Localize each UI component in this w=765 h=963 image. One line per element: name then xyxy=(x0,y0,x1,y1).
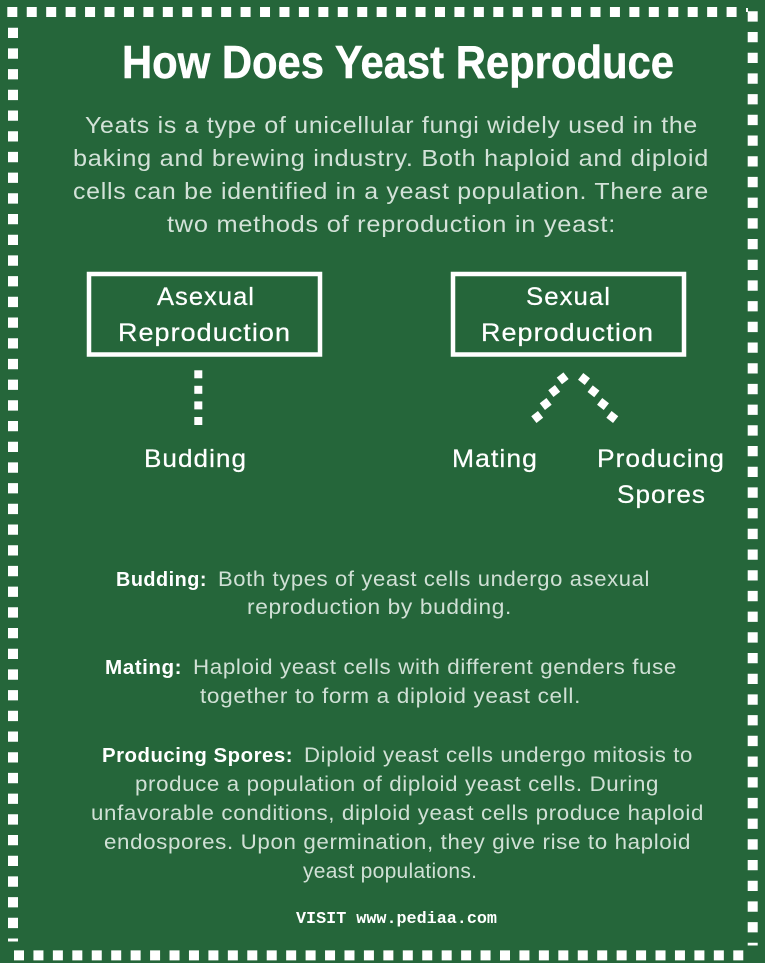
intro paragraph: baking and brewing industry. Both haploid and diploid xyxy=(73,145,709,171)
intro paragraph xyxy=(73,112,709,237)
title: How Does Yeast Reproduce xyxy=(122,36,674,88)
box: asexual reproduction: Reproduction xyxy=(118,319,291,347)
dotted connector: sexual to producing spores xyxy=(578,373,618,423)
text block: producing spores description: Producing Spores: xyxy=(102,745,293,767)
text block: producing spores description: unfavorable conditions, diploid yeast cells produce haploid xyxy=(91,802,704,825)
text block: mating description: Haploid yeast cells with different genders fuse xyxy=(193,656,677,679)
text block: producing spores description: produce a population of diploid yeast cells. During xyxy=(135,773,659,796)
text block: mating description: Mating: xyxy=(105,657,182,679)
text block: budding description: Budding: xyxy=(116,569,207,591)
text block: budding description xyxy=(116,568,650,619)
text block: budding description: reproduction by budding. xyxy=(247,596,512,619)
text block: producing spores description: Diploid yeast cells undergo mitosis to xyxy=(304,744,693,767)
box: asexual reproduction xyxy=(89,274,320,354)
dotted connector: sexual to mating xyxy=(531,372,569,423)
intro paragraph: cells can be identified in a yeast population. There are xyxy=(73,178,709,204)
label: producing spores xyxy=(597,445,725,509)
text block: producing spores description xyxy=(91,744,704,883)
text block: mating description xyxy=(105,656,677,708)
label: budding: Budding xyxy=(144,445,247,473)
box: sexual reproduction: Reproduction xyxy=(481,319,654,347)
text block: budding description: Both types of yeast cells undergo asexual xyxy=(218,568,650,591)
text block: producing spores description: yeast populations. xyxy=(303,860,477,883)
footer: website link: VISIT www.pediaa.com xyxy=(296,910,497,929)
intro paragraph: two methods of reproduction in yeast: xyxy=(167,211,616,237)
intro paragraph: Yeats is a type of unicellular fungi widely used in the xyxy=(85,112,698,138)
text block: mating description: together to form a diploid yeast cell. xyxy=(200,685,581,708)
label: mating: Mating xyxy=(452,445,538,473)
dotted connector: asexual to budding xyxy=(194,370,202,425)
box: sexual reproduction: Sexual xyxy=(526,283,611,311)
label: producing spores: Producing xyxy=(597,445,725,473)
text block: producing spores description: endospores. Upon germination, they give rise to haploid xyxy=(104,831,691,854)
box: sexual reproduction xyxy=(453,274,684,354)
label: producing spores: Spores xyxy=(617,481,706,509)
box: asexual reproduction: Asexual xyxy=(157,283,255,311)
